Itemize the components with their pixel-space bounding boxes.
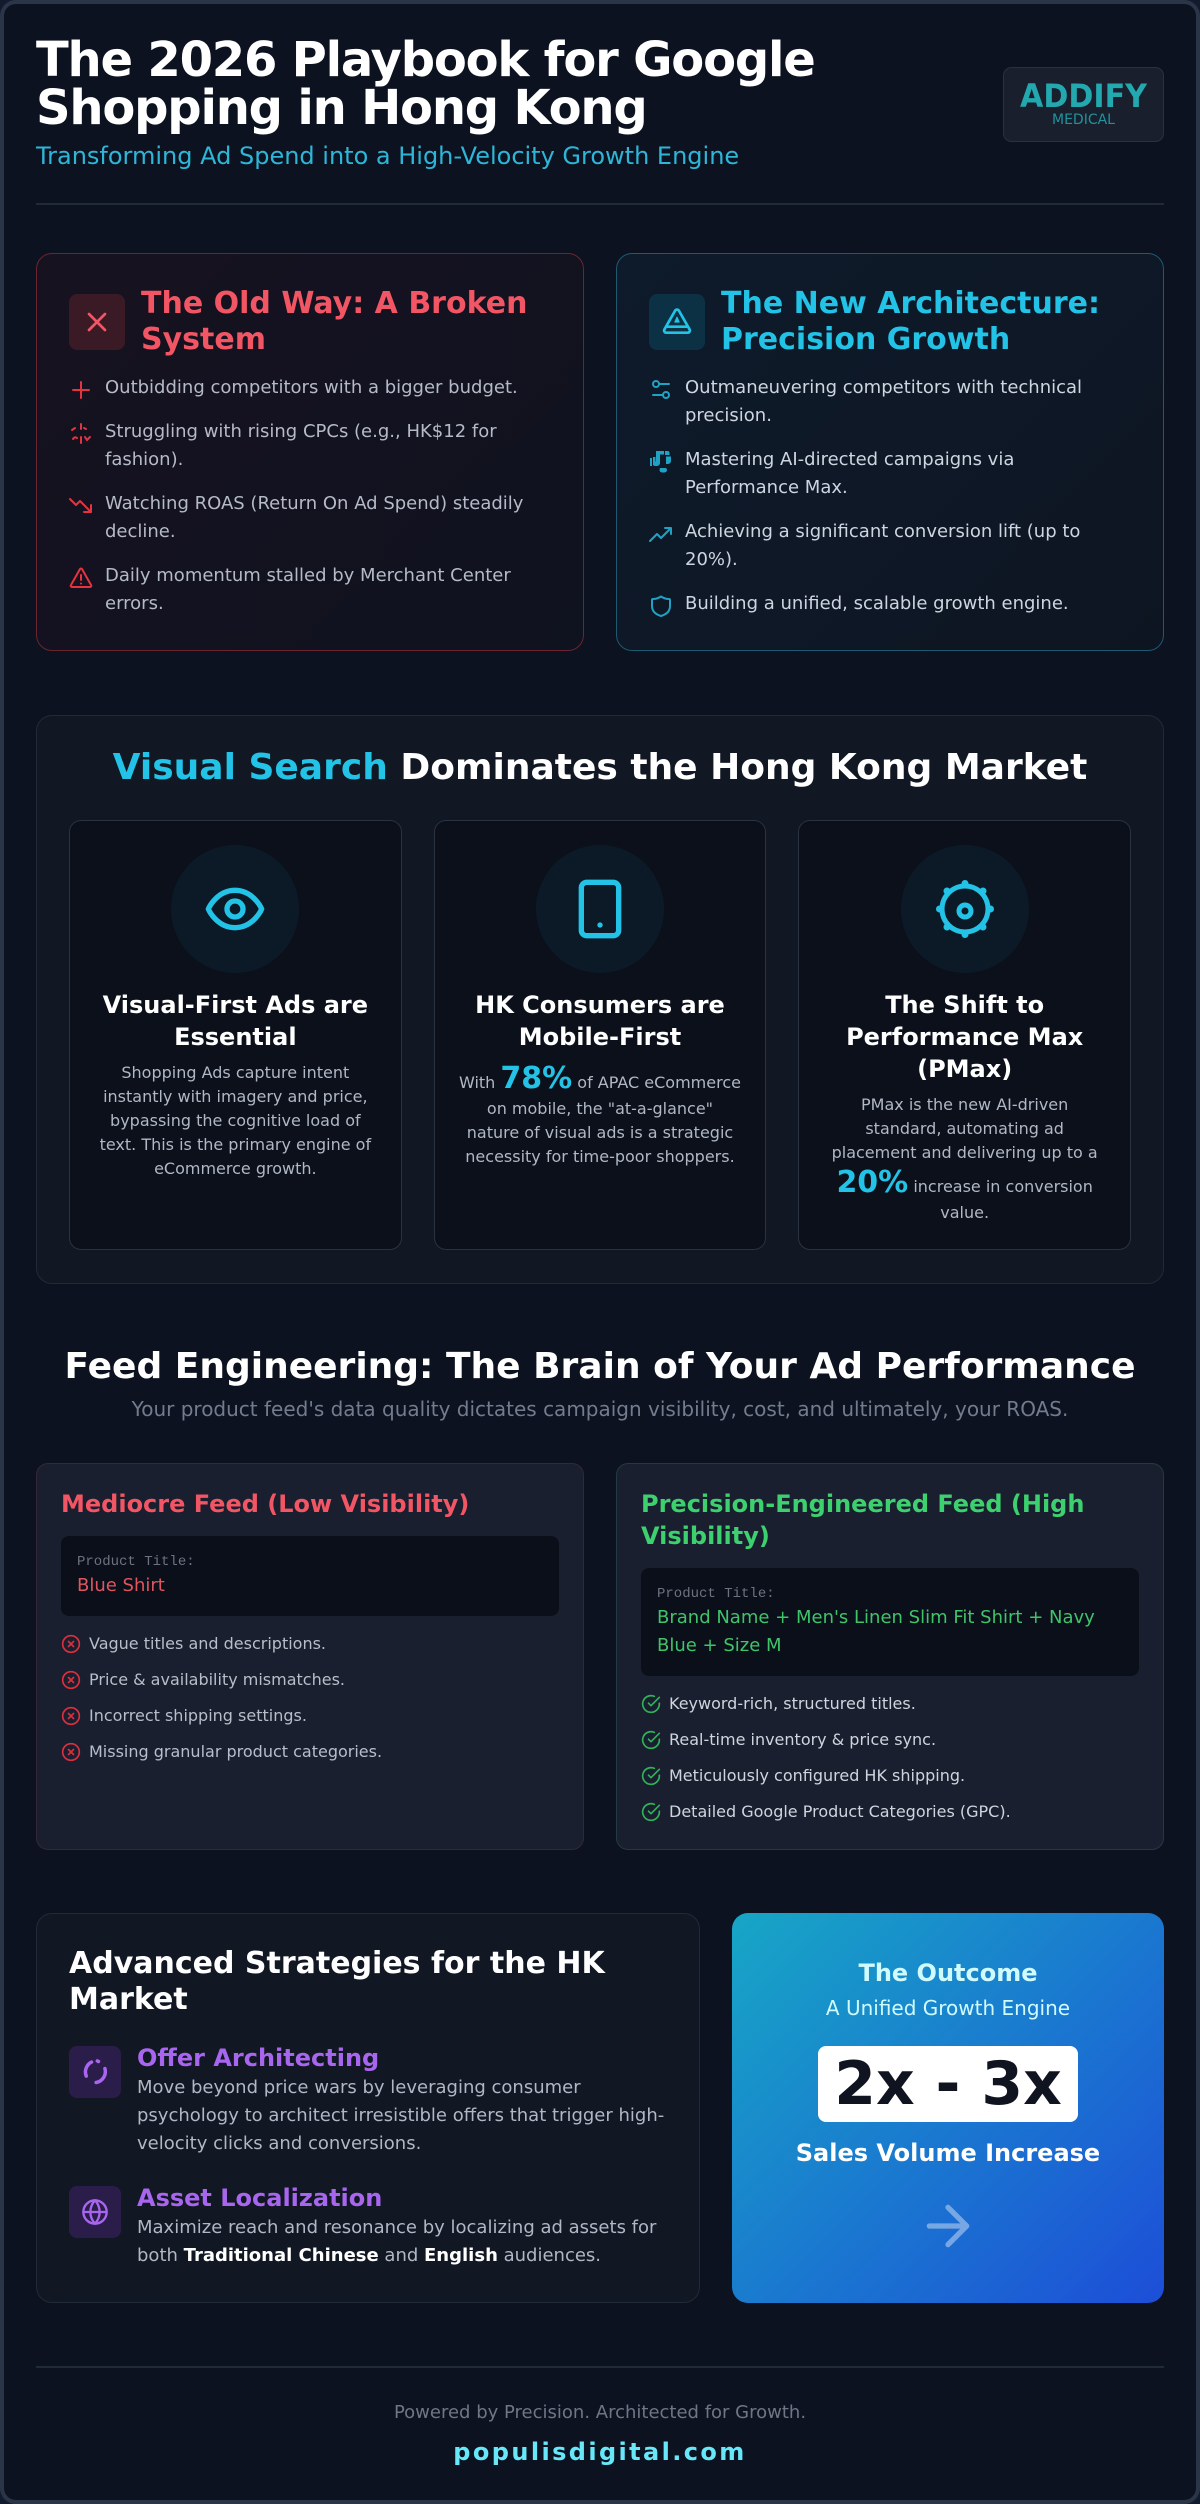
text: outcome subtitle: A Unified Growth Engine: [826, 1996, 1070, 2020]
title: The 2026 Playbook for Google Shopping in Hong Kong: [36, 32, 815, 136]
strategy: offer architecting: Offer Architecting: [137, 2044, 379, 2072]
list: precision feed benefits: Detailed Google Product Categories (GPC).: [669, 1802, 1011, 1821]
card: performance max: The Shift to Performance Max (PMax): [846, 991, 1083, 1083]
panel: visual search: [36, 715, 1164, 1284]
card: mobile-first: [434, 820, 766, 1250]
panel: precision-engineered feed: Precision-Engineered Feed (High Visibility): [641, 1490, 1084, 1550]
icon: eye: [171, 845, 299, 973]
heading: new architecture: The New Architecture: Precision Growth: [721, 286, 1100, 357]
text: feed subtitle: Your product feed's data quality dictates campaign visibility, cost, and ultimately, your ROAS.: [132, 1397, 1068, 1421]
strategy: asset localization: [69, 2184, 656, 2266]
strategy: offer architecting: Move beyond price wars by leveraging consumer psychology to architect irresistible offers that trigger high-velocity clicks and conversions.: [137, 2077, 664, 2154]
product title example: mediocre: Product Title:: [77, 1554, 195, 1570]
product title example: mediocre: [61, 1536, 559, 1616]
icon: smartphone: [536, 845, 664, 973]
heading: visual search: Visual Search Dominates the Hong Kong Market: [113, 747, 1087, 788]
strategy: asset localization: Asset Localization: [137, 2184, 382, 2212]
stat: sales multiple: 2x - 3x: [834, 2049, 1062, 2119]
logo: Addify Medical: MEDICAL: [1052, 112, 1115, 128]
list: precision feed benefits: Meticulously configured HK shipping.: [669, 1766, 965, 1785]
list item: technical precision: Outmaneuvering competitors with technical precision.: [685, 377, 1082, 426]
card: mobile-first: HK Consumers are Mobile-First: [475, 991, 725, 1051]
product title example: precision: Brand Name + Men's Linen Slim Fit Shirt + Navy Blue + Size M: [657, 1607, 1095, 1656]
product title example: mediocre: Blue Shirt: [77, 1575, 165, 1596]
list: precision feed benefits: [642, 1694, 1011, 1822]
icon: refresh arcs: [69, 2046, 121, 2098]
panel: mediocre feed: [36, 1463, 584, 1850]
list item: declining ROAS: Watching ROAS (Return On Ad Spend) steadily decline.: [105, 493, 523, 542]
heading: old way: The Old Way: A Broken System: [141, 286, 527, 357]
panel: mediocre feed: Mediocre Feed (Low Visibility): [61, 1490, 469, 1518]
logo: Addify Medical: [1003, 67, 1164, 142]
card: performance max: PMax is the new AI-driven standard, automating ad placement and delivering up to a 20% increase in conversion value.: [832, 1095, 1098, 1222]
icon: arrow right: [926, 2204, 970, 2248]
list: mediocre feed issues: Vague titles and descriptions.: [89, 1634, 326, 1653]
product title example: precision: Product Title:: [657, 1586, 775, 1602]
icon: cross: [69, 294, 125, 350]
list: precision feed benefits: Keyword-rich, structured titles.: [669, 1694, 916, 1713]
panel: advanced strategies: Advanced Strategies for the HK Market: [69, 1946, 605, 2017]
strategy: offer architecting: [69, 2044, 664, 2154]
list item: merchant center errors: Daily momentum stalled by Merchant Center errors.: [105, 565, 511, 614]
list: mediocre feed issues: Price & availability mismatches.: [89, 1670, 345, 1689]
panel: advanced strategies: [36, 1913, 700, 2303]
card: mobile-first: With 78% of APAC eCommerce on mobile, the "at-a-glance" nature of visual ads is a strategic necessity for time-poor shoppers.: [459, 1061, 741, 1166]
footer tagline: Powered by Precision. Architected for Growth.: [394, 2402, 806, 2423]
list: mediocre feed issues: Missing granular product categories.: [89, 1742, 382, 1761]
icon: target wheel: [901, 845, 1029, 973]
panel: precision-engineered feed: [616, 1463, 1164, 1850]
text: sales volume increase: Sales Volume Increase: [796, 2139, 1100, 2167]
list: mediocre feed issues: [62, 1634, 382, 1762]
panel: the old way: [36, 253, 584, 651]
icon: globe: [69, 2186, 121, 2238]
panel: the outcome: [732, 1913, 1164, 2303]
list item: AI-directed campaigns: Mastering AI-directed campaigns via Performance Max.: [685, 449, 1014, 498]
footer url: populisdigital.com: [453, 2438, 747, 2466]
list item: rising CPCs: Struggling with rising CPCs (e.g., HK$12 for fashion).: [105, 421, 497, 470]
list item: outbidding: Outbidding competitors with a bigger budget.: [105, 377, 518, 398]
list: precision feed benefits: Real-time inventory & price sync.: [669, 1730, 936, 1749]
card: performance max: [798, 820, 1131, 1250]
panel: the new architecture: [616, 253, 1164, 651]
subtitle: Transforming Ad Spend into a High-Velocity Growth Engine: [36, 142, 739, 170]
list item: growth engine: Building a unified, scalable growth engine.: [685, 593, 1069, 614]
logo: Addify Medical: ADDIFY: [1020, 77, 1148, 115]
product title example: precision: [641, 1568, 1139, 1676]
heading: feed engineering: Feed Engineering: The Brain of Your Ad Performance: [64, 1346, 1136, 1387]
text: outcome heading: The Outcome: [858, 1959, 1038, 1987]
icon: triangle: [649, 294, 705, 350]
card: visual-first ads: [69, 820, 402, 1250]
list item: conversion lift: Achieving a significant conversion lift (up to 20%).: [685, 521, 1080, 570]
card: visual-first ads: Shopping Ads capture intent instantly with imagery and price, bypassing the cognitive load of text. This is the primary engine of eCommerce growth.: [100, 1063, 371, 1178]
strategy: asset localization: Maximize reach and resonance by localizing ad assets for both Traditional Chinese and English audiences.: [137, 2217, 656, 2266]
list: mediocre feed issues: Incorrect shipping settings.: [89, 1706, 307, 1725]
card: visual-first ads: Visual-First Ads are Essential: [103, 991, 368, 1051]
